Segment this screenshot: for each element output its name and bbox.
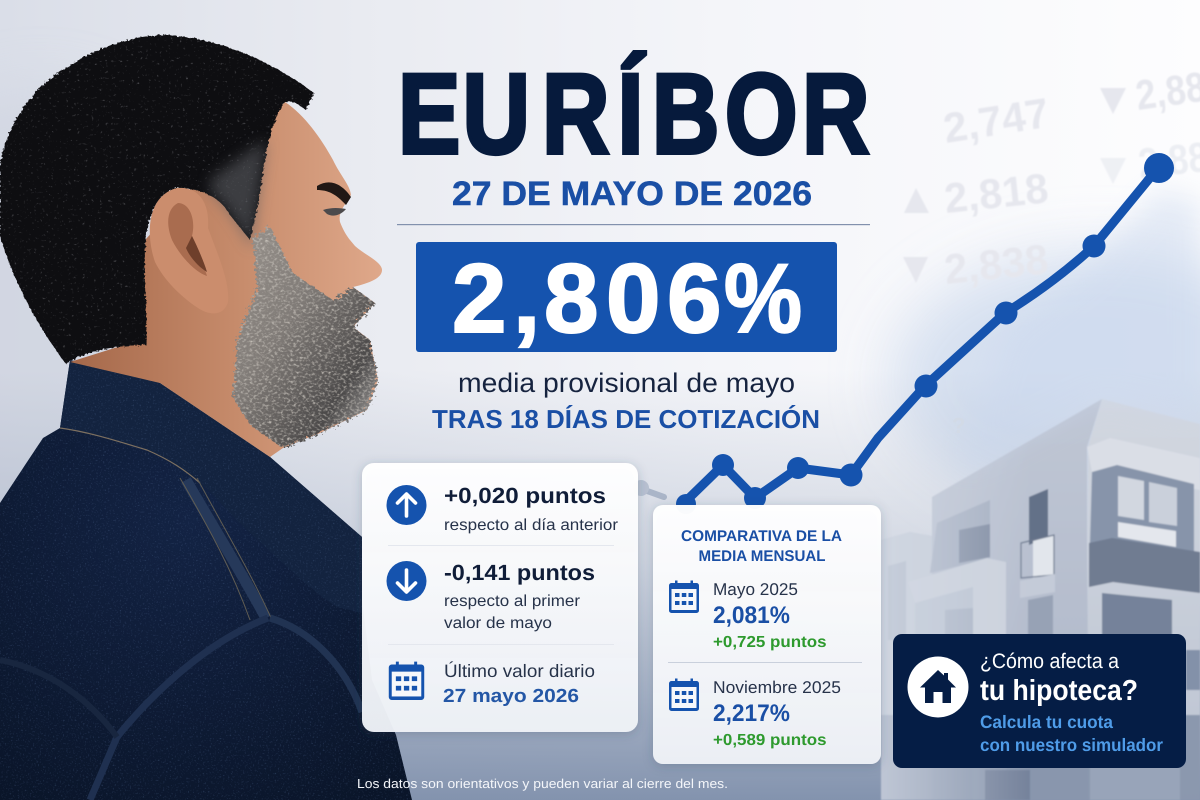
building illustration <box>881 399 1200 800</box>
line chart <box>633 153 1174 514</box>
daily change value: +0,020 puntos <box>444 483 606 508</box>
simulator link: Calcula tu cuota <box>980 712 1114 732</box>
icon: calendar November <box>669 678 699 711</box>
main building walls <box>932 399 1200 800</box>
May 2025 values: +0,725 puntos <box>713 634 827 651</box>
icon: house <box>908 656 968 718</box>
shoulder seam <box>186 480 266 618</box>
small window <box>1029 489 1048 545</box>
May 2025 values: 2,081% <box>713 602 790 629</box>
faded background quotes: 2,838 <box>942 235 1050 293</box>
main value box: % <box>724 243 802 353</box>
footnote: Los datos son orientativos y pueden variar al cierre del mes. <box>357 776 728 791</box>
faded background quotes: 2,747 <box>940 89 1052 152</box>
glass balcony <box>1020 535 1055 598</box>
ground floor <box>881 715 1200 800</box>
jacket <box>0 360 412 800</box>
upper bay <box>1087 438 1200 490</box>
yoke seams <box>90 618 268 800</box>
May 2025 values: Mayo 2025 <box>713 580 798 599</box>
question emphasis: tu hipoteca? <box>980 675 1138 707</box>
lower right window <box>1102 593 1172 640</box>
title divider <box>397 224 870 225</box>
simulator link: con nuestro simulador <box>980 735 1163 755</box>
recessed terrace <box>930 500 990 573</box>
fog over building <box>881 441 1030 800</box>
bay window <box>1090 465 1194 553</box>
November 2025 values: 2,217% <box>713 700 790 727</box>
comparison heading: COMPARATIVA DE LA <box>681 528 842 545</box>
faint question mark: ? <box>952 413 965 438</box>
icon: down arrow <box>386 561 426 601</box>
icon: calendar <box>389 662 424 700</box>
comparison heading: MEDIA MENSUAL <box>698 548 826 565</box>
collar <box>60 360 362 613</box>
hair <box>0 35 314 364</box>
ear <box>150 188 228 313</box>
first value caption: valor de mayo <box>444 615 552 632</box>
faded background quotes <box>903 63 1200 293</box>
last value date: 27 mayo 2026 <box>443 686 579 707</box>
terrace slab <box>908 558 1006 800</box>
left building <box>881 532 932 800</box>
last value label: Último valor diario <box>444 661 595 681</box>
first value caption <box>444 593 581 632</box>
dark balcony panel <box>1089 538 1200 593</box>
faded background quotes: 2,818 <box>942 164 1050 222</box>
first value caption: respecto al primer <box>444 593 581 610</box>
chart area shading <box>960 190 1200 470</box>
icon: up arrow <box>386 485 426 525</box>
question: ¿Cómo afecta a <box>980 650 1119 673</box>
subtitle: media provisional de mayo <box>458 368 795 398</box>
November 2025 values <box>713 678 841 749</box>
simulator link <box>980 712 1163 755</box>
grey temple <box>210 140 266 250</box>
date: 27 DE MAYO DE 2026 <box>452 175 812 213</box>
eyebrow and eye <box>317 182 351 216</box>
beard <box>233 227 378 448</box>
comparison heading <box>681 528 842 565</box>
main value box <box>416 242 837 353</box>
face and neck <box>70 102 382 457</box>
person in profile <box>0 35 412 800</box>
first value change: -0,141 puntos <box>444 560 595 585</box>
call to action <box>893 634 1186 768</box>
November 2025 values: Noviembre 2025 <box>713 678 841 697</box>
panel: monthly comparison <box>653 505 881 764</box>
main value box: 2,806 <box>452 243 722 353</box>
daily change caption: respecto al día anterior <box>444 517 619 534</box>
lower window <box>1028 595 1053 640</box>
panel: daily changes <box>362 463 638 732</box>
subtitle highlight: TRAS 18 DÍAS DE COTIZACIÓN <box>432 404 820 434</box>
November 2025 values: +0,589 puntos <box>713 732 827 749</box>
title: EURÍBOR <box>398 51 869 178</box>
icon: calendar May <box>669 580 699 613</box>
May 2025 values <box>713 580 827 651</box>
